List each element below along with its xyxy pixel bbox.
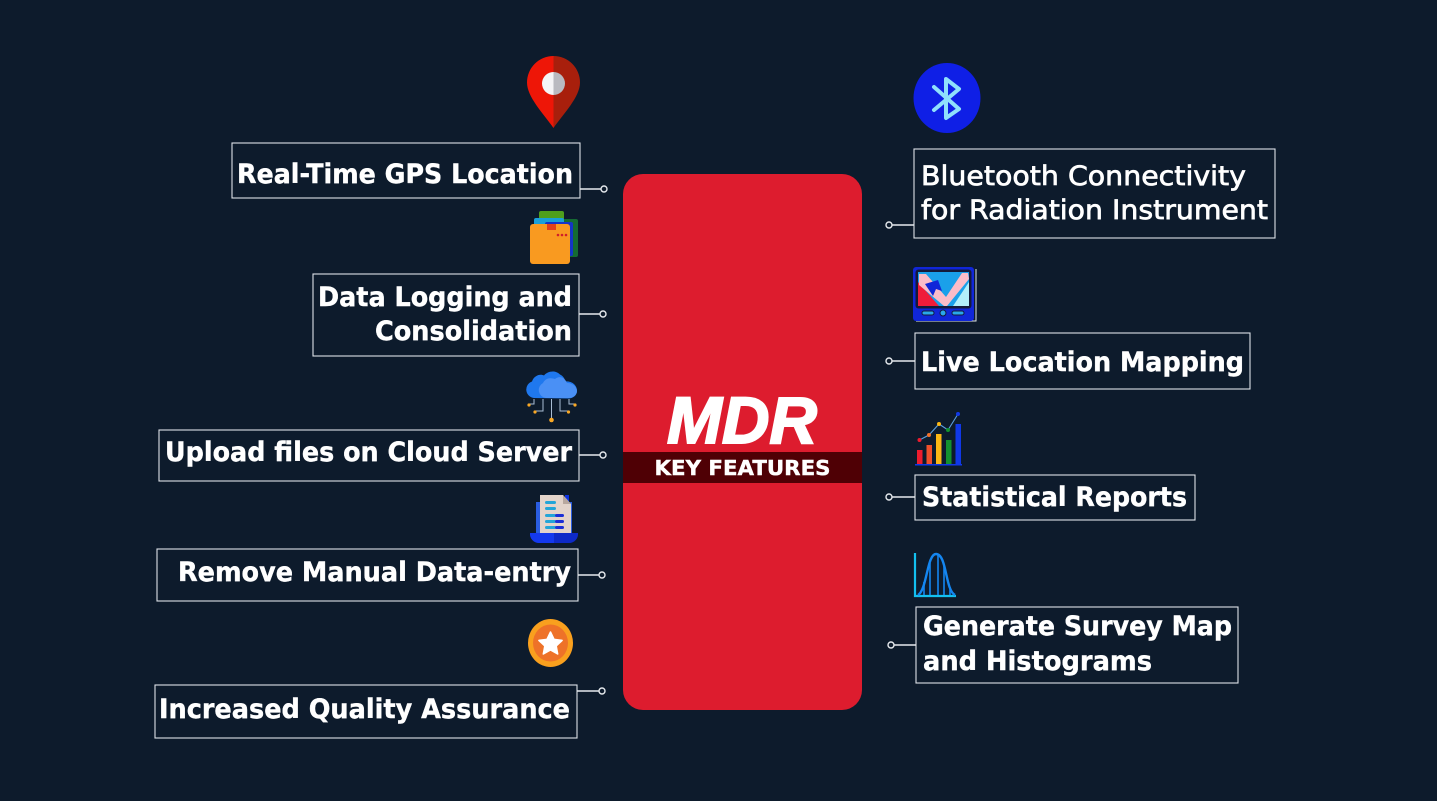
icon: bluetooth (914, 63, 980, 133)
feature: Bluetooth Connectivity for Radiation Instrument: for Radiation Instrument (921, 195, 1268, 226)
feature: Increased Quality Assurance (155, 685, 605, 738)
connector (888, 642, 916, 648)
connector (577, 688, 605, 694)
feature: Data Logging and Consolidation: Data Logging and (318, 282, 572, 313)
feature: Generate Survey Map and Histograms: Generate Survey Map (923, 611, 1232, 642)
connector (886, 358, 915, 364)
connector (886, 494, 915, 500)
feature: Statistical Reports: Statistical Reports (922, 482, 1187, 513)
icon: folders (530, 211, 578, 264)
feature: Data Logging and Consolidation: Consolidation (375, 316, 572, 347)
feature: Remove Manual Data-entry (157, 549, 605, 601)
icon: star badge (528, 619, 573, 667)
feature: Data Logging and Consolidation (313, 274, 606, 356)
feature: Upload files on Cloud Server (159, 430, 606, 481)
central red panel (623, 174, 862, 710)
connector (579, 311, 606, 317)
feature: Live Location Mapping: Live Location Mapping (921, 347, 1244, 378)
feature: Live Location Mapping (886, 333, 1250, 389)
feature: Increased Quality Assurance: Increased Quality Assurance (159, 694, 570, 725)
connector (580, 186, 607, 192)
panel title: MDR: MDR (667, 383, 817, 457)
panel subtitle: key features: KEY FEATURES (654, 456, 830, 480)
feature: Real-Time GPS Location (232, 143, 607, 198)
panel band: key features (623, 452, 862, 483)
feature: Upload files on Cloud Server: Upload files on Cloud Server (165, 437, 573, 468)
feature: Statistical Reports (886, 475, 1195, 520)
feature: Real-Time GPS Location: Real-Time GPS Location (237, 159, 573, 190)
icon: map screen (913, 267, 976, 321)
icon: GPS pin (527, 56, 580, 128)
feature: Generate Survey Map and Histograms: and Histograms (923, 646, 1152, 677)
icon: bar and line chart (915, 412, 962, 466)
icon: cloud network (526, 372, 577, 422)
connector (886, 222, 914, 228)
feature: Bluetooth Connectivity for Radiation Instrument (886, 149, 1275, 238)
icon: document (530, 495, 578, 543)
feature: Bluetooth Connectivity for Radiation Instrument: Bluetooth Connectivity (921, 161, 1246, 192)
feature: Remove Manual Data-entry: Remove Manual Data-entry (178, 557, 571, 588)
feature: Generate Survey Map and Histograms (888, 607, 1238, 683)
connector (579, 452, 606, 458)
icon: histogram curve (915, 553, 956, 596)
connector (578, 572, 605, 578)
